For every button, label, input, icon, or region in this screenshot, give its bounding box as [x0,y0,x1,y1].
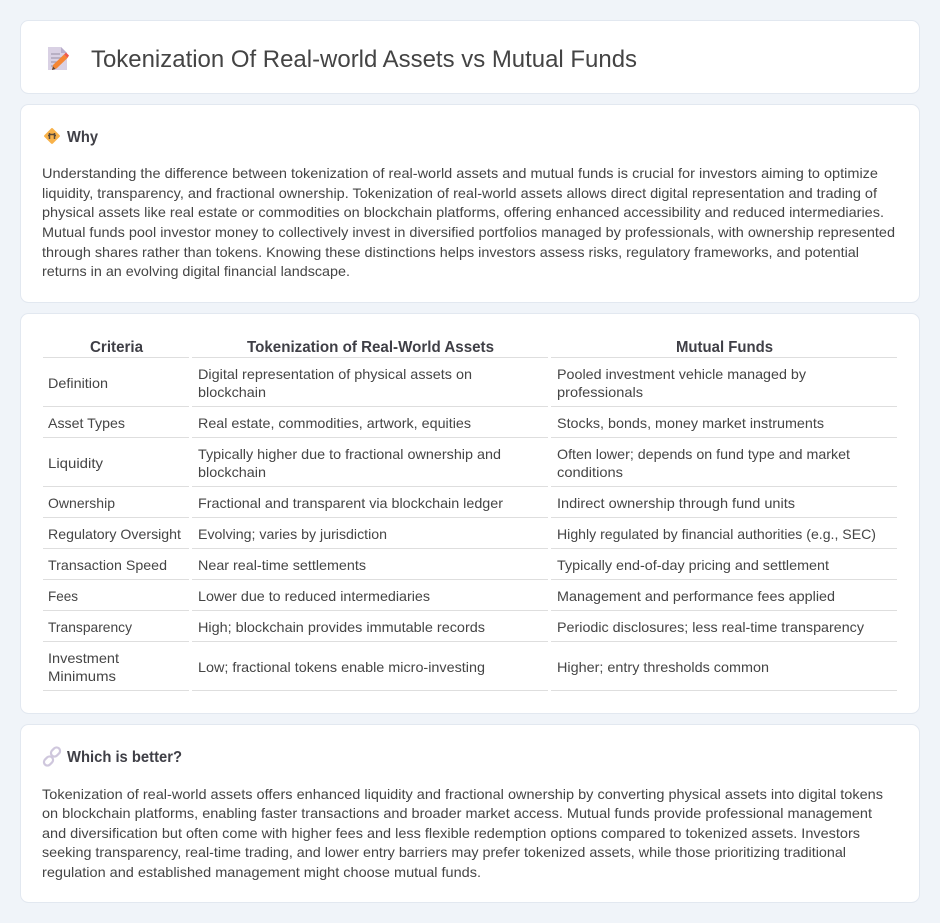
panel: title card [20,20,920,94]
text block: why paragraph [42,165,895,279]
row: fees: Management and performance fees applied [557,588,835,604]
row: asset types: Stocks, bonds, money market instruments [557,415,824,431]
row: ownership: Fractional and transparent via blockchain ledger [198,495,503,511]
row: definition: Pooled investment vehicle managed by [557,366,806,382]
row: regulatory oversight: Highly regulated by financial authorities (e.g., SEC) [557,526,876,542]
icon: orange diamond sign [44,128,60,144]
row: asset types [48,415,824,431]
row: transaction speed: Transaction Speed [48,557,167,573]
panel: why [20,104,920,302]
row: transparency: High; blockchain provides immutable records [198,619,485,635]
row: transaction speed [48,557,829,573]
heading: which is better: Which is better? [67,749,182,766]
row: asset types: Real estate, commodities, artwork, equities [198,415,471,431]
row: investment minimums: Minimums [48,668,116,684]
table header [90,339,773,356]
row: ownership [48,495,795,511]
row: fees: Fees [48,588,78,604]
table header: Tokenization of Real-World Assets [247,339,494,356]
text block: which is better paragraph: regulation and established management might choose mutual funds. [42,864,481,880]
row: transaction speed: Near real-time settlements [198,557,366,573]
row: investment minimums [48,650,769,684]
row: investment minimums: Investment [48,650,119,666]
row: ownership: Indirect ownership through fund units [557,495,795,511]
text block: why paragraph: through shares rather than tokens. Knowing these distinctions helps investors assess risks, regulatory frameworks, and potential [42,244,859,260]
text block: which is better paragraph [42,786,883,880]
row: liquidity [48,446,850,480]
icon: memo with pencil [48,47,69,70]
text block: why paragraph: returns in an evolving digital financial landscape. [42,263,350,279]
icon: chain link [42,746,62,767]
text block: which is better paragraph: seeking transparency, real-time trading, and lower entry barriers may prefer tokenized assets, while those prioritizing traditional [42,844,846,860]
row: transparency [48,619,864,635]
panel: comparison table [20,314,920,714]
row: liquidity: blockchain [198,464,266,480]
table header: Mutual Funds [676,339,773,356]
text block: why paragraph: Mutual funds pool investor money to collectively invest in diversified portfolios managed by professionals, with ownership represented [42,224,895,240]
row: transaction speed: Typically end-of-day pricing and settlement [557,557,829,573]
text block: which is better paragraph: on blockchain platforms, enabling faster transactions and broader market access. Mutual funds provide professional management [42,805,872,821]
row: fees [48,588,835,604]
panel: which is better [20,724,920,902]
row: asset types: Asset Types [48,415,125,431]
row: definition: professionals [557,384,643,400]
text block: why paragraph: liquidity, transparency, and fractional ownership. Tokenization of real-world assets allows direct digital representation and trading of [42,185,877,201]
row: definition: blockchain [198,384,266,400]
row: regulatory oversight: Regulatory Oversight [48,526,181,542]
row: liquidity: Liquidity [48,455,103,471]
row: liquidity: Typically higher due to fractional ownership and [198,446,501,462]
row: liquidity: Often lower; depends on fund type and market [557,446,850,462]
text block: which is better paragraph: Tokenization of real-world assets offers enhanced liquidity and fractional ownership by converting physical assets into digital tokens [42,786,883,802]
row: regulatory oversight: Evolving; varies by jurisdiction [198,526,387,542]
title: Tokenization Of Real-world Assets vs Mutual Funds [91,46,637,73]
row: ownership: Ownership [48,495,115,511]
row: definition: Digital representation of physical assets on [198,366,472,382]
text block: why paragraph: Understanding the difference between tokenization of real-world assets and mutual funds is crucial for investors aiming to optimize [42,165,878,181]
row: transparency: Transparency [48,619,132,635]
text block: why paragraph: physical assets like real estate or commodities on blockchain platforms, offering enhanced accessibility and reduced intermediaries. [42,204,884,220]
row: fees: Lower due to reduced intermediaries [198,588,430,604]
row: transparency: Periodic disclosures; less real-time transparency [557,619,864,635]
row: definition [48,366,806,400]
heading: why: Why [67,129,98,146]
row: regulatory oversight [48,526,876,542]
text block: which is better paragraph: and diversification but often come with higher fees and less flexible redemption options compared to tokenized assets. Investors [42,825,860,841]
row: liquidity: conditions [557,464,623,480]
row: definition: Definition [48,375,108,391]
row: investment minimums: Low; fractional tokens enable micro-investing [198,659,485,675]
row: investment minimums: Higher; entry thresholds common [557,659,769,675]
table header: Criteria [90,339,143,356]
